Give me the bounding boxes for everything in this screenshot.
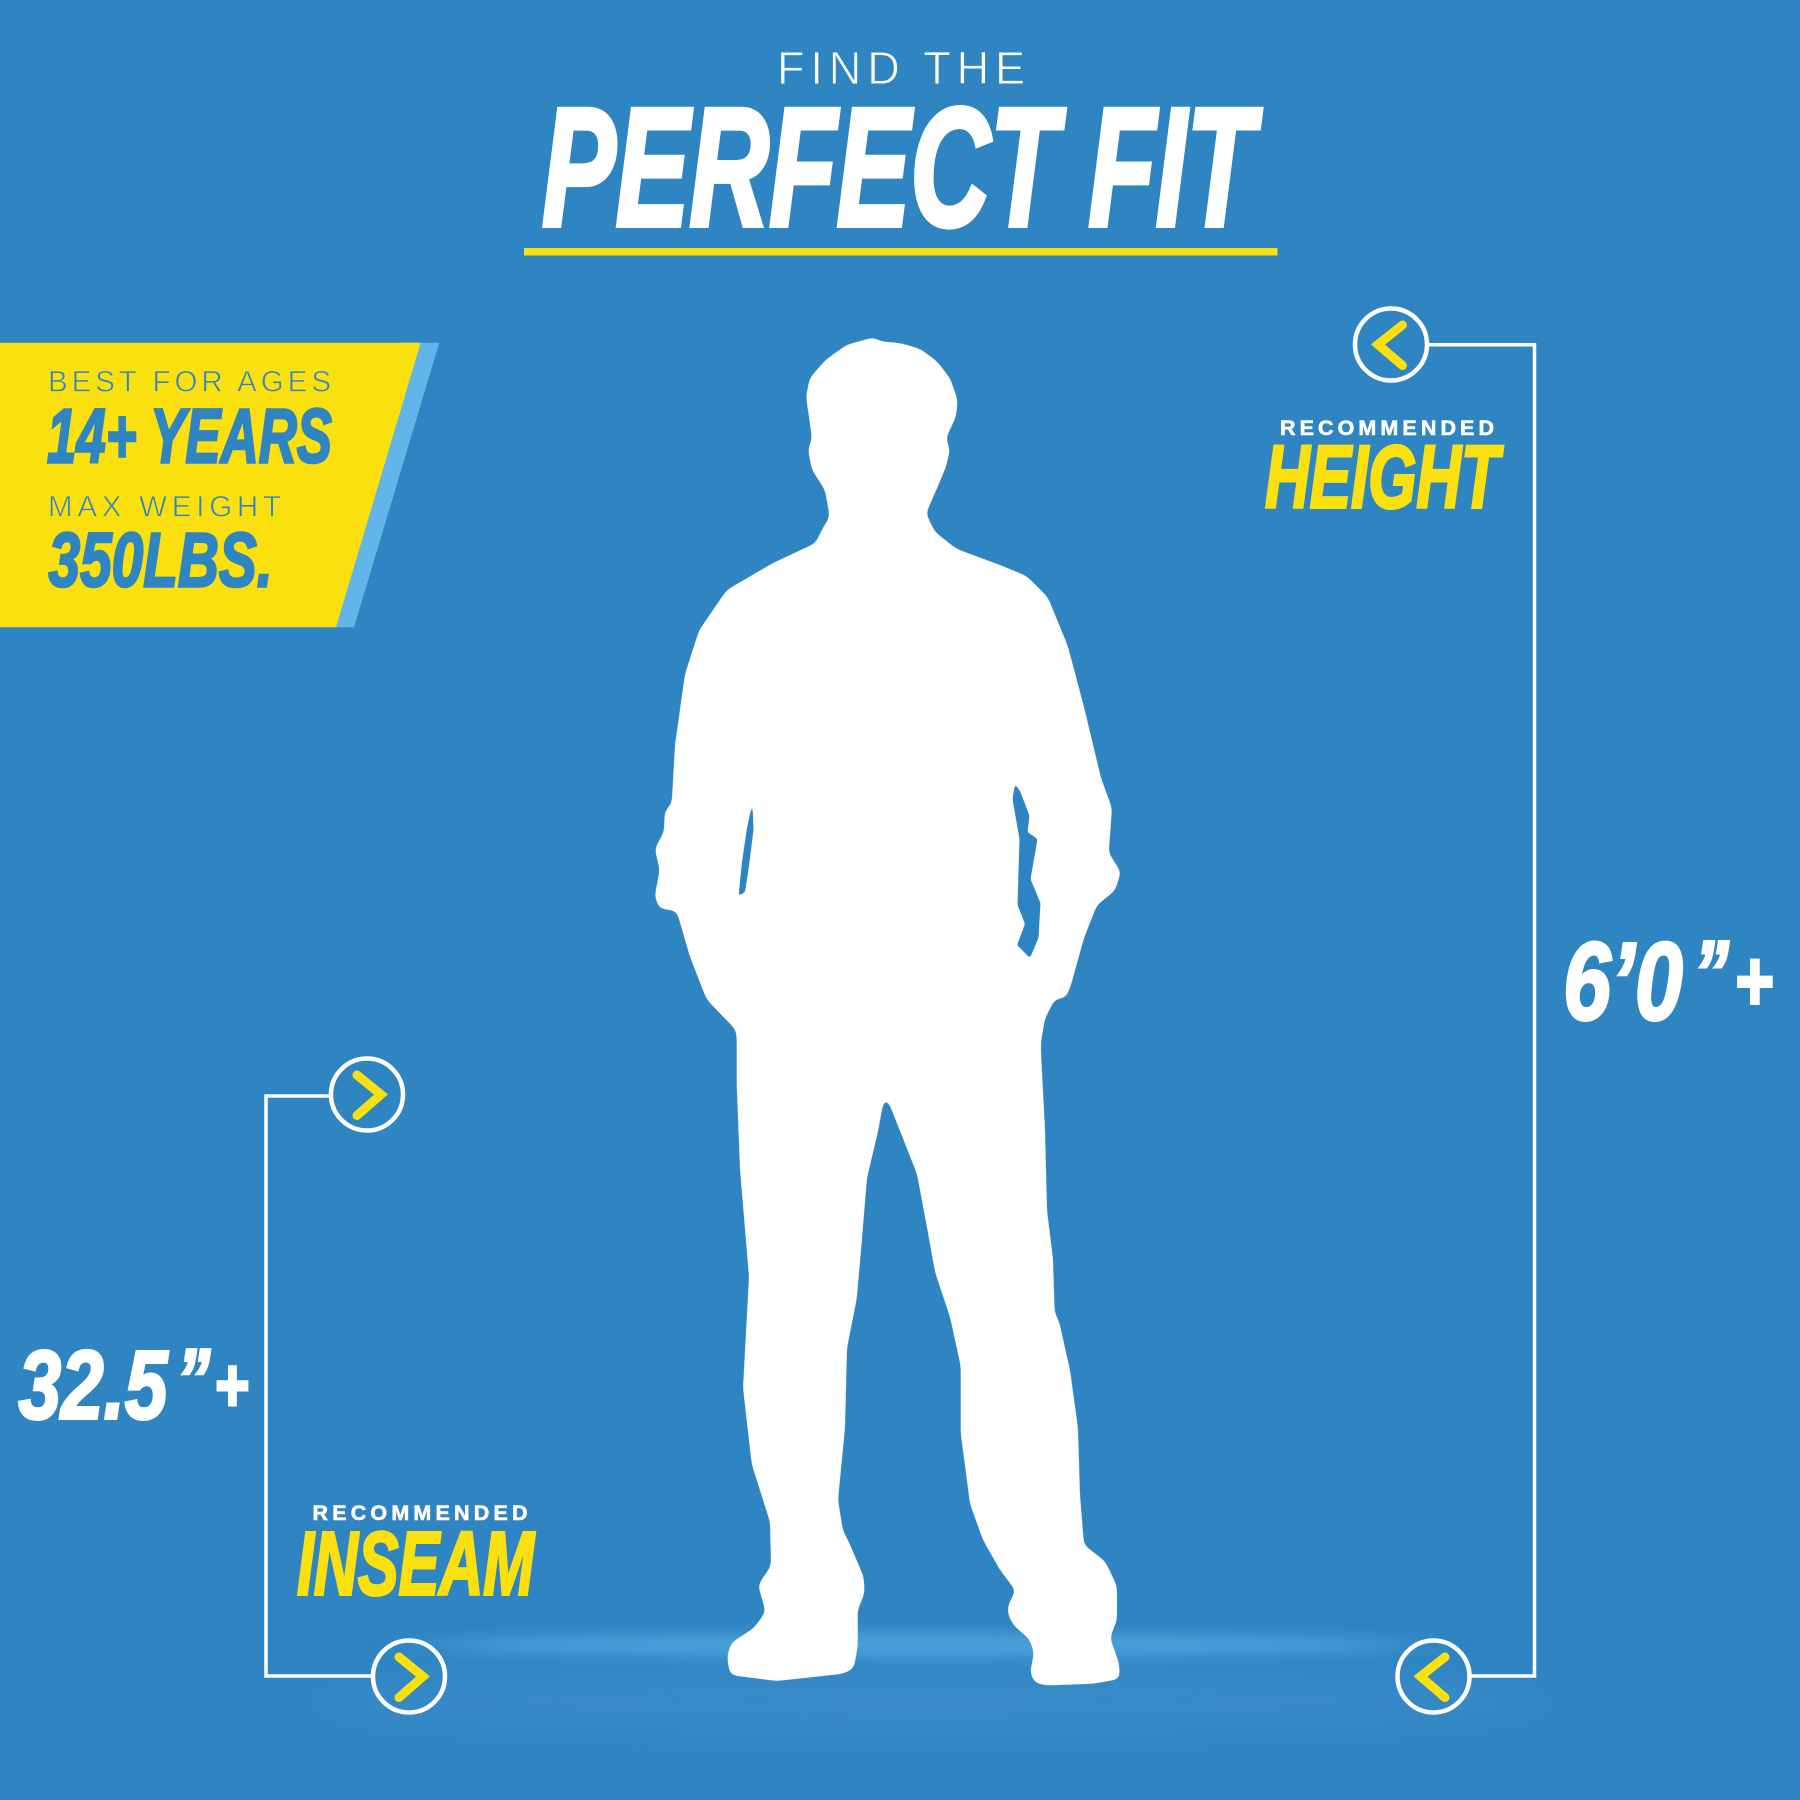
right arm gap	[1012, 784, 1040, 958]
label small line: RECOMMENDED	[312, 1501, 528, 1525]
label small line: RECOMMENDED	[1280, 416, 1494, 440]
value: inseam: ”	[177, 1333, 211, 1427]
label big line: INSEAM	[297, 1514, 535, 1614]
text: max weight: MAX WEIGHT	[48, 491, 281, 524]
body outline	[655, 337, 1121, 1686]
label: recommended height	[1265, 416, 1504, 526]
text: 14+ years: 14+ YEARS	[47, 394, 332, 480]
icon: bottom marker	[1398, 1640, 1470, 1712]
icon: top marker	[331, 1058, 403, 1130]
icon: bottom marker	[373, 1640, 445, 1712]
value: inseam: 32.5	[18, 1331, 167, 1440]
title underline	[524, 248, 1278, 256]
value: height: ”	[1694, 923, 1729, 1024]
title line: find the: FIND THE	[777, 42, 1031, 94]
height bracket	[1355, 308, 1534, 1712]
text: 350 lbs: 350LBS.	[48, 518, 272, 604]
panel accent edge	[320, 343, 439, 627]
value: height: +	[1734, 934, 1773, 1029]
panel: age and weight limits	[0, 343, 439, 627]
text: best for ages: BEST FOR AGES	[48, 366, 331, 398]
title line: perfect fit: PERFECT FIT	[542, 72, 1262, 262]
value: inseam: +	[214, 1344, 249, 1428]
inseam bracket	[266, 1058, 445, 1712]
label big line: HEIGHT	[1265, 426, 1504, 526]
label: recommended inseam	[297, 1501, 535, 1614]
bracket line	[1429, 345, 1534, 1676]
panel yellow background	[0, 343, 421, 627]
silhouette of standing man	[655, 337, 1121, 1686]
bracket line	[266, 1096, 371, 1676]
left pocket gap	[738, 802, 754, 896]
value: height: 6’0	[1563, 919, 1683, 1043]
icon: top marker	[1355, 308, 1427, 380]
title	[524, 42, 1278, 262]
floor glow	[310, 1633, 1550, 1736]
